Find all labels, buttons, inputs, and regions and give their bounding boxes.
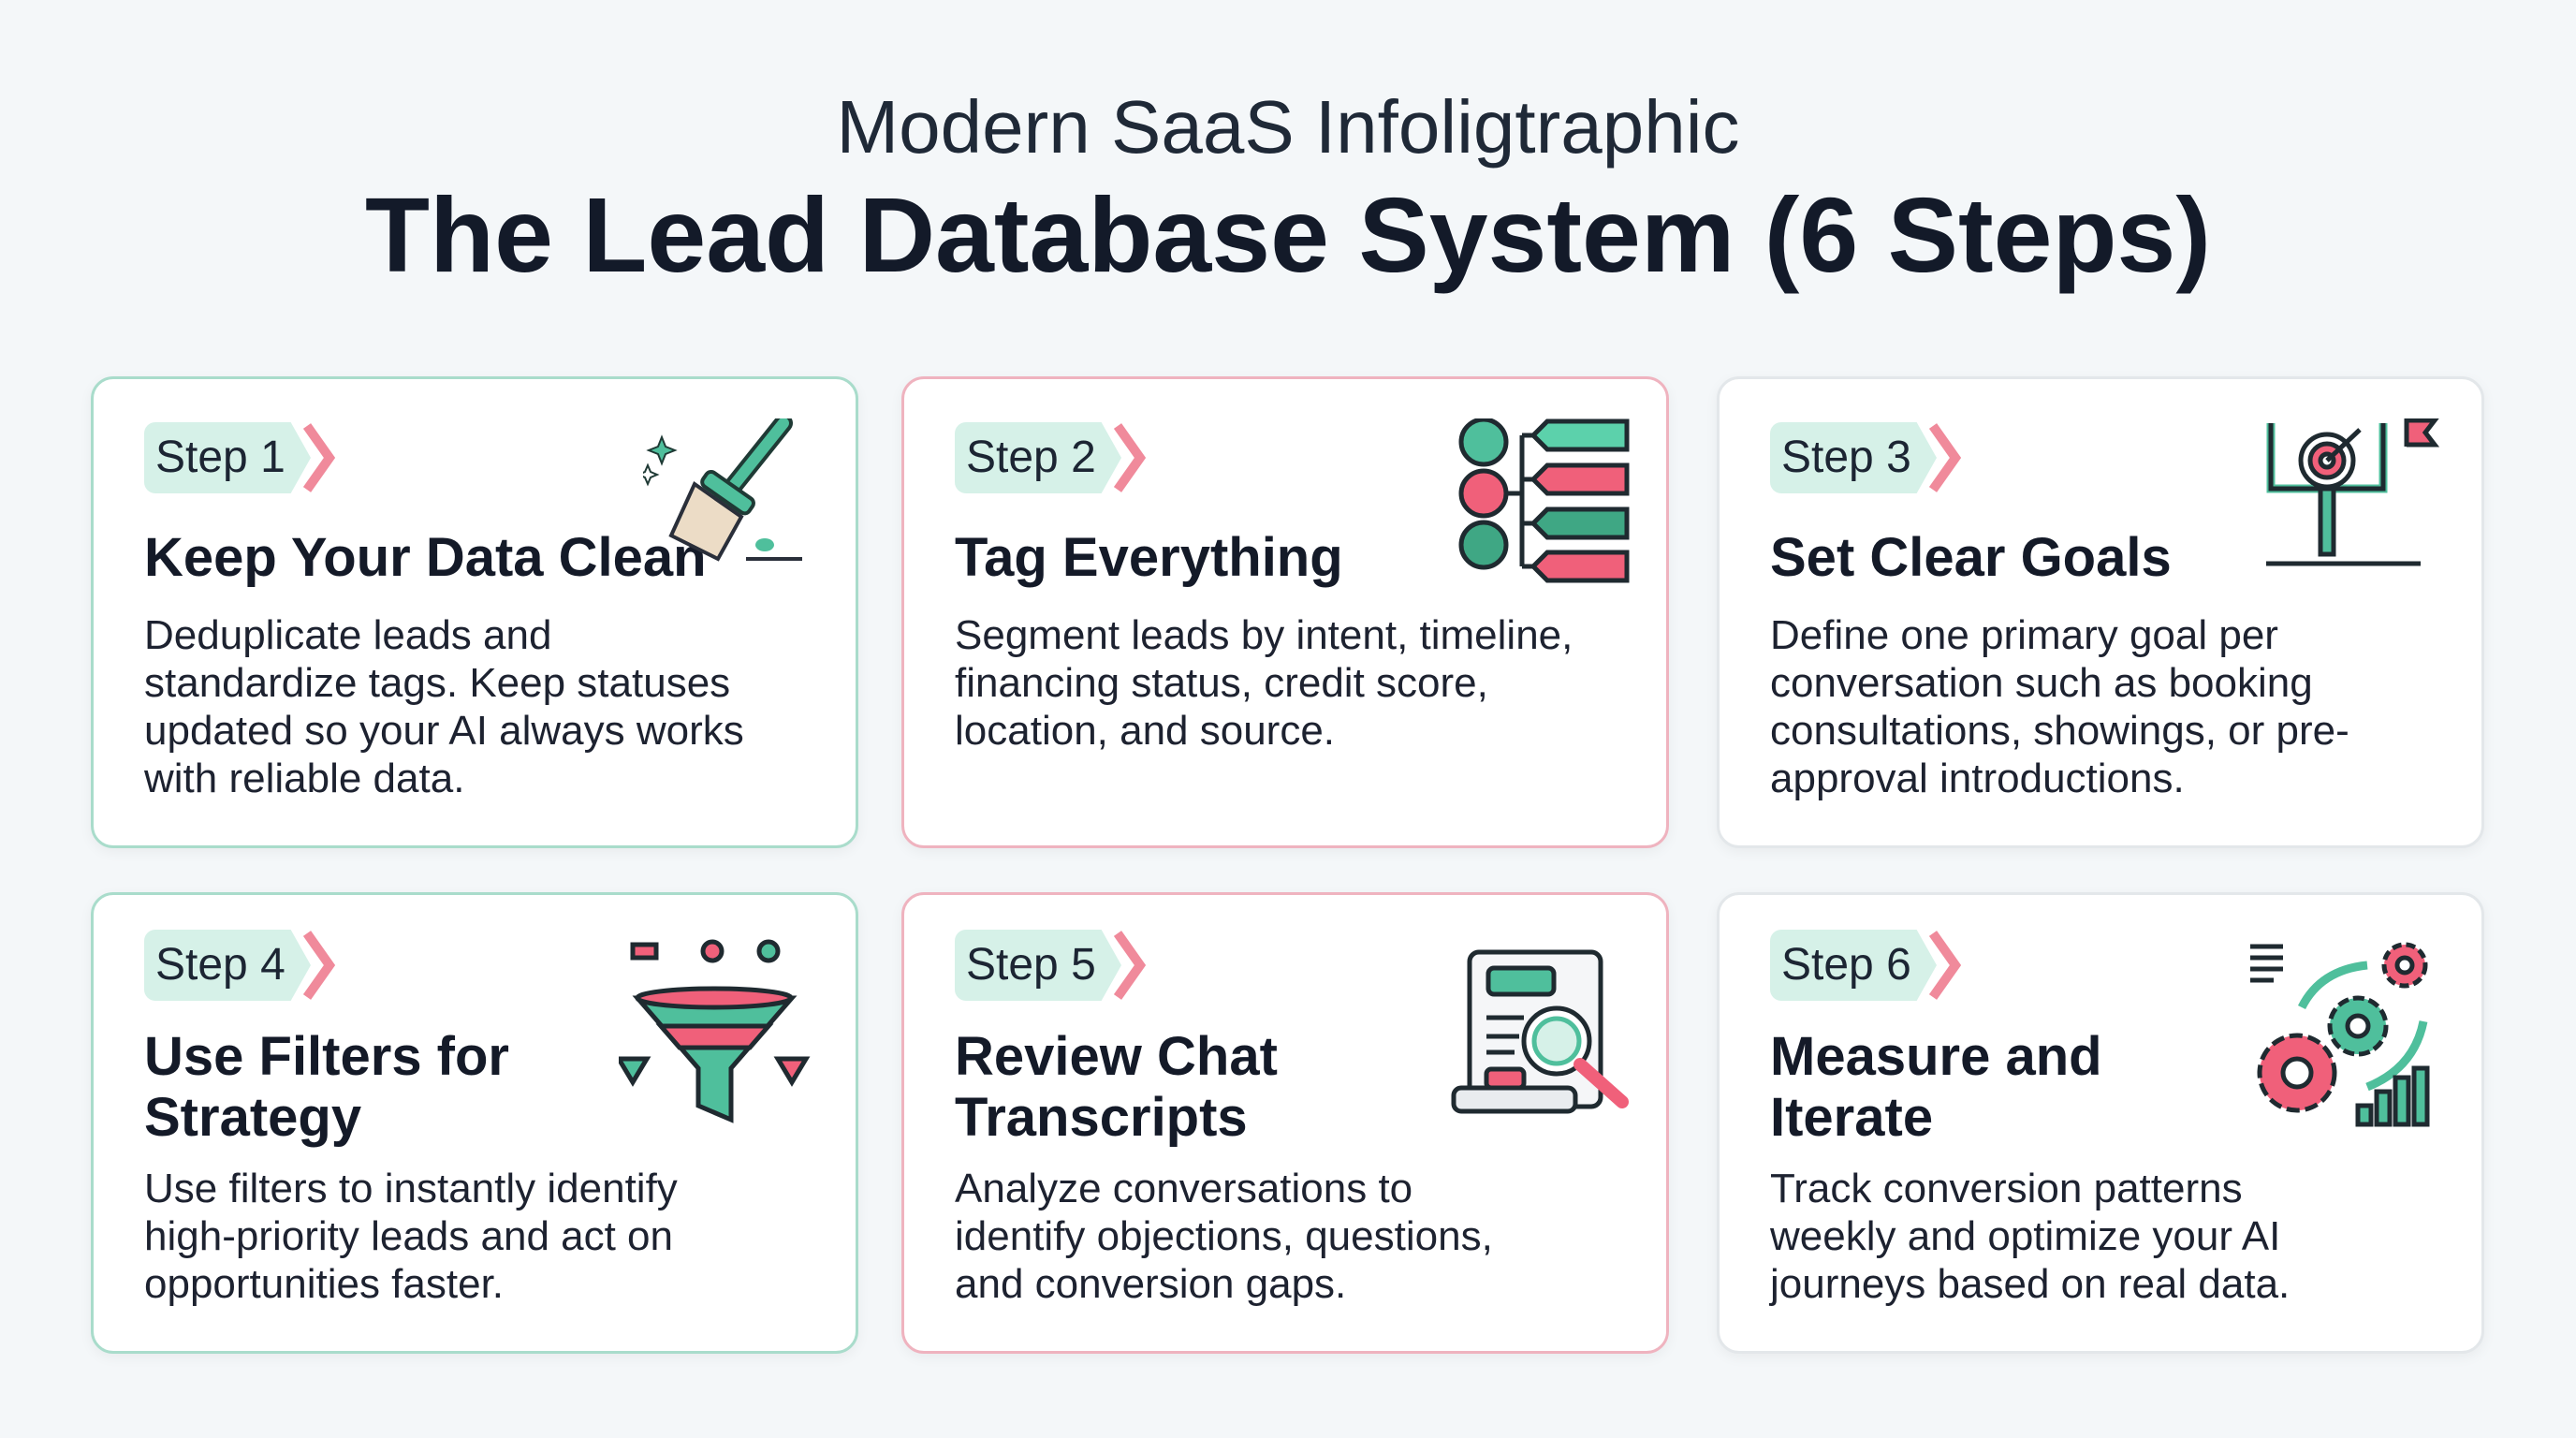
panel: step 6 <box>1717 892 2484 1354</box>
heading: Iterate <box>1770 1087 1933 1148</box>
body text: weekly and optimize your AI <box>1770 1213 2280 1259</box>
body text: high-priority leads and act on <box>144 1213 673 1259</box>
badge: step 2 <box>955 422 1146 493</box>
body text: opportunities faster. <box>144 1261 504 1307</box>
panel: step 3 <box>1717 376 2484 848</box>
panel: step 1 <box>91 376 858 848</box>
body text: standardize tags. Keep statuses <box>144 660 730 706</box>
heading <box>144 1026 509 1148</box>
panel: step 2 <box>901 376 1669 848</box>
heading: Transcripts <box>955 1087 1248 1148</box>
badge: step 3 <box>1770 422 1961 493</box>
body text: financing status, credit score, <box>955 660 1488 706</box>
badge: step 6 <box>1770 930 1961 1001</box>
body text: updated so your AI always works <box>144 708 744 754</box>
icon: broom <box>643 418 802 562</box>
body text: consultations, showings, or pre- <box>1770 708 2349 754</box>
badge: step 4: Step 4 <box>155 940 285 990</box>
badge: step 6: Step 6 <box>1781 940 1911 990</box>
heading: Use Filters for <box>144 1026 509 1087</box>
badge: step 5 <box>955 930 1146 1001</box>
badge: step 3: Step 3 <box>1781 433 1911 482</box>
badge: step 4 <box>144 930 335 1001</box>
panel: step 4 <box>91 892 858 1354</box>
heading: Tag Everything <box>955 527 1343 588</box>
subtitle: Modern SaaS Infoligtraphic <box>837 85 1739 169</box>
heading: Strategy <box>144 1087 361 1148</box>
body text: Use filters to instantly identify <box>144 1166 678 1211</box>
badge: step 2: Step 2 <box>966 433 1096 482</box>
body text: Track conversion patterns <box>1770 1166 2243 1211</box>
body text: with reliable data. <box>144 756 464 801</box>
body text: identify objections, questions, <box>955 1213 1493 1259</box>
body text <box>1769 1166 2290 1307</box>
badge: step 1: Step 1 <box>155 433 285 482</box>
panel: step 5 <box>901 892 1669 1354</box>
body text: journeys based on real data. <box>1770 1261 2290 1307</box>
body text: location, and source. <box>955 708 1335 754</box>
badge: step 5: Step 5 <box>966 940 1096 990</box>
icon: funnel <box>619 940 811 1123</box>
heading <box>955 1026 1278 1148</box>
body text <box>144 612 744 801</box>
body text: approval introductions. <box>1770 756 2185 801</box>
heading: Review Chat <box>955 1026 1278 1087</box>
body text: Analyze conversations to <box>955 1166 1412 1211</box>
icon: tags <box>1458 418 1629 582</box>
body text: Define one primary goal per <box>1770 612 2278 658</box>
title: The Lead Database System (6 Steps) <box>365 176 2211 294</box>
body text: Deduplicate leads and <box>144 612 551 658</box>
body text <box>955 1166 1493 1307</box>
heading: Set Clear Goals <box>1770 527 2172 588</box>
body text: conversation such as booking <box>1770 660 2313 706</box>
icon: transcript magnifier <box>1451 949 1629 1114</box>
body text <box>1770 612 2349 801</box>
body text: and conversion gaps. <box>955 1261 1346 1307</box>
icon: gears and chart <box>2250 942 2430 1127</box>
body text <box>144 1166 678 1307</box>
heading: Keep Your Data Clean <box>144 527 707 588</box>
icon: goal target <box>2266 418 2439 565</box>
badge: step 1 <box>144 422 335 493</box>
heading: Measure and <box>1770 1026 2102 1087</box>
body text <box>955 612 1573 754</box>
heading <box>1770 1026 2102 1148</box>
body text: Segment leads by intent, timeline, <box>955 612 1573 658</box>
